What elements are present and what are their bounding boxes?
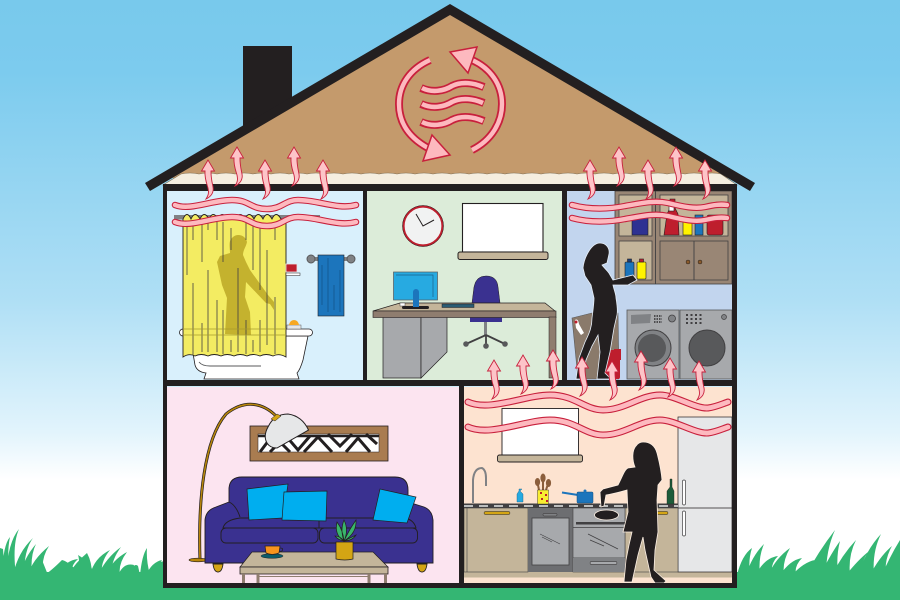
- washing machine: [627, 310, 679, 379]
- heat waves in attic: [421, 83, 484, 125]
- computer monitor: [394, 272, 438, 309]
- towel rail and towel: [307, 255, 355, 316]
- saucepan: [562, 490, 593, 503]
- oil bottle: [667, 479, 674, 504]
- teacup on saucer: [261, 546, 283, 558]
- floor: [464, 572, 732, 578]
- soap dispenser: [517, 489, 523, 502]
- room: kitchen: [464, 387, 732, 583]
- room: living room: [167, 387, 459, 583]
- dishwasher: [528, 508, 573, 572]
- shower rod: [174, 215, 320, 220]
- laundry products: [625, 199, 723, 279]
- sink faucet: [473, 468, 486, 503]
- shelf with red soap box: [286, 264, 300, 276]
- ground strip: [0, 586, 900, 600]
- heat swirl in attic: [399, 47, 502, 161]
- woman silhouette: [576, 243, 637, 379]
- shower silhouette: [217, 235, 274, 335]
- potted plant: [335, 520, 356, 560]
- laundry basket: [572, 313, 619, 379]
- wall clock: [402, 206, 444, 246]
- kitchen window: [498, 408, 582, 462]
- insulation: [163, 173, 737, 185]
- coffee table: [240, 552, 388, 583]
- countertop: [464, 504, 678, 508]
- whiteboard: [458, 204, 548, 260]
- arc floor lamp: [189, 404, 308, 562]
- cushions: [247, 484, 416, 523]
- blue sofa: [205, 477, 433, 572]
- rising heat arrows into attic: [202, 147, 712, 199]
- fridge: [678, 417, 732, 572]
- rising heat arrows from kitchen: [488, 350, 706, 400]
- cupboards: [615, 191, 732, 284]
- heat waves: kitchen: [468, 395, 728, 435]
- heat waves: bathroom: [175, 200, 356, 226]
- base cabinets: [464, 508, 678, 572]
- room: laundry: [567, 191, 732, 380]
- roof: [145, 4, 755, 191]
- attic: [172, 12, 728, 178]
- bathtub: [180, 329, 312, 379]
- utensil jar: [535, 474, 551, 504]
- framed picture: [250, 426, 388, 461]
- heat waves: laundry: [572, 202, 727, 222]
- chimney: [243, 46, 292, 136]
- house walls: [163, 184, 737, 588]
- room: bathroom: [167, 191, 363, 380]
- shower curtain: [183, 214, 286, 357]
- circulation arrow: left: [399, 60, 450, 161]
- soap dish: [287, 320, 301, 329]
- office chair: [463, 276, 508, 349]
- oven: [573, 508, 625, 572]
- desk: [373, 300, 556, 378]
- circulation arrow: right: [450, 47, 502, 150]
- room: office: [367, 191, 562, 380]
- woman cooking silhouette: [594, 442, 666, 583]
- grass: right: [730, 530, 900, 600]
- grass: left: [0, 529, 170, 600]
- filing cabinet: [383, 317, 447, 378]
- dryer: [680, 310, 732, 379]
- detergent jug: [600, 350, 620, 379]
